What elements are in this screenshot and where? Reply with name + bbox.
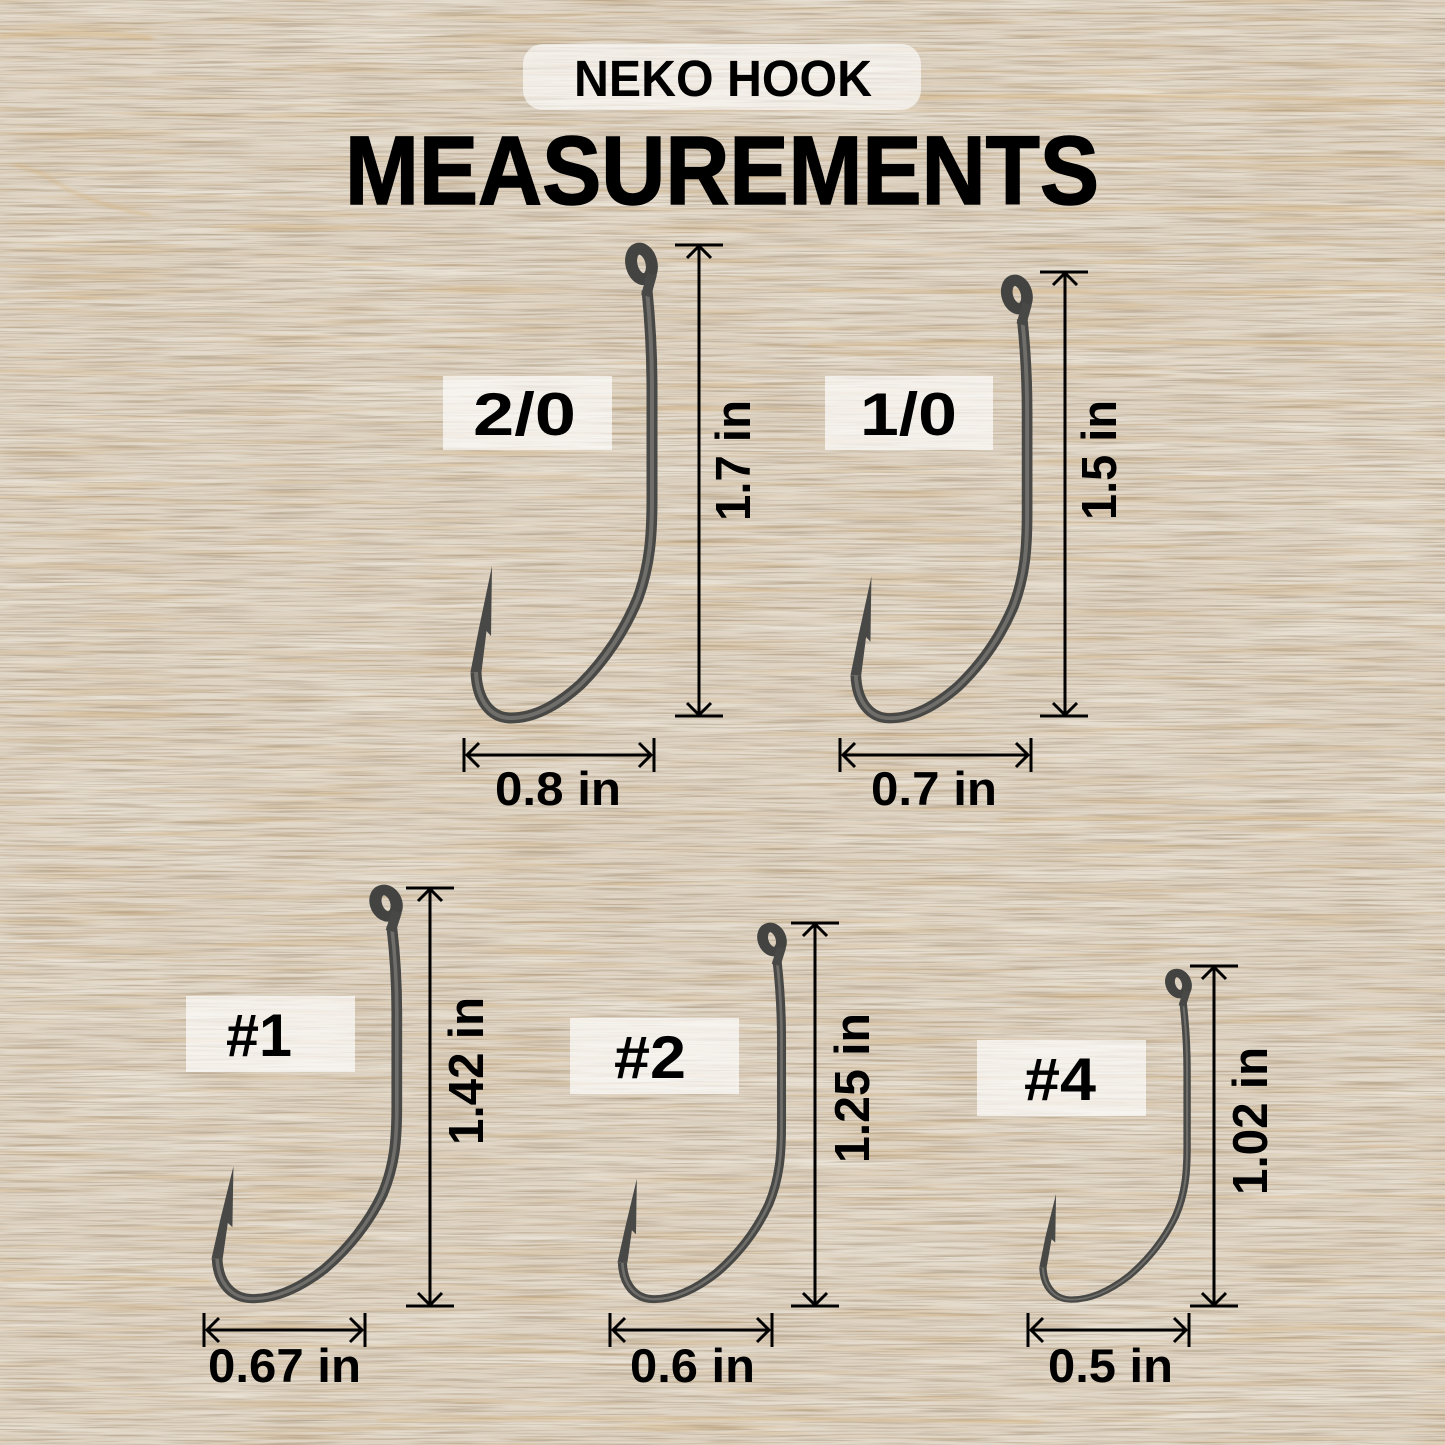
hook #4 bbox=[1039, 971, 1189, 1300]
width dimension arrow 2/0 bbox=[464, 738, 654, 772]
width value 2/0: 0.8 in bbox=[495, 762, 621, 815]
height dimension arrow #1 bbox=[406, 888, 454, 1306]
size group: #2 bbox=[570, 923, 880, 1392]
width value #1: 0.67 in bbox=[208, 1339, 361, 1392]
height value #2: 1.25 in bbox=[826, 1013, 880, 1163]
width value #4: 0.5 in bbox=[1048, 1339, 1173, 1392]
size label #1 bbox=[186, 996, 355, 1072]
width dimension arrow #4 bbox=[1028, 1313, 1189, 1347]
height dimension arrow #4 bbox=[1190, 966, 1238, 1306]
size label 1/0: 1/0 bbox=[860, 381, 957, 448]
size group: #1 bbox=[186, 888, 494, 1392]
size label #4: #4 bbox=[1024, 1046, 1097, 1113]
size label #2: #2 bbox=[614, 1024, 686, 1091]
height value #4: 1.02 in bbox=[1224, 1047, 1278, 1195]
size label #2 bbox=[570, 1018, 739, 1094]
size label #1: #1 bbox=[226, 1002, 292, 1069]
hook 1/0 bbox=[850, 278, 1030, 718]
size group: 1/0 bbox=[825, 272, 1127, 815]
height value #1: 1.42 in bbox=[440, 997, 494, 1145]
hook #1 bbox=[211, 888, 400, 1299]
width value #2: 0.6 in bbox=[630, 1339, 755, 1392]
size label 2/0 bbox=[443, 376, 612, 450]
title pill: NEKO HOOK: NEKO HOOK bbox=[574, 50, 872, 107]
width dimension arrow #2 bbox=[610, 1313, 772, 1347]
width dimension arrow #1 bbox=[204, 1313, 365, 1347]
hook 2/0 bbox=[470, 246, 655, 718]
title pill: NEKO HOOK bbox=[523, 44, 921, 110]
size label #4 bbox=[977, 1040, 1146, 1116]
size group: #4 bbox=[977, 966, 1278, 1392]
hook #2 bbox=[617, 926, 784, 1299]
height dimension arrow 2/0 bbox=[675, 245, 723, 716]
height value 1/0: 1.5 in bbox=[1073, 400, 1127, 520]
size label 1/0 bbox=[825, 376, 993, 450]
height value 2/0: 1.7 in bbox=[707, 400, 761, 521]
height dimension arrow 1/0 bbox=[1040, 272, 1088, 716]
height dimension arrow #2 bbox=[791, 923, 839, 1306]
size label 2/0: 2/0 bbox=[473, 381, 576, 448]
heading: MEASUREMENTS: MEASUREMENTS bbox=[345, 116, 1099, 225]
width dimension arrow 1/0 bbox=[840, 738, 1031, 772]
width value 1/0: 0.7 in bbox=[871, 762, 997, 815]
size group: 2/0 bbox=[443, 245, 761, 815]
